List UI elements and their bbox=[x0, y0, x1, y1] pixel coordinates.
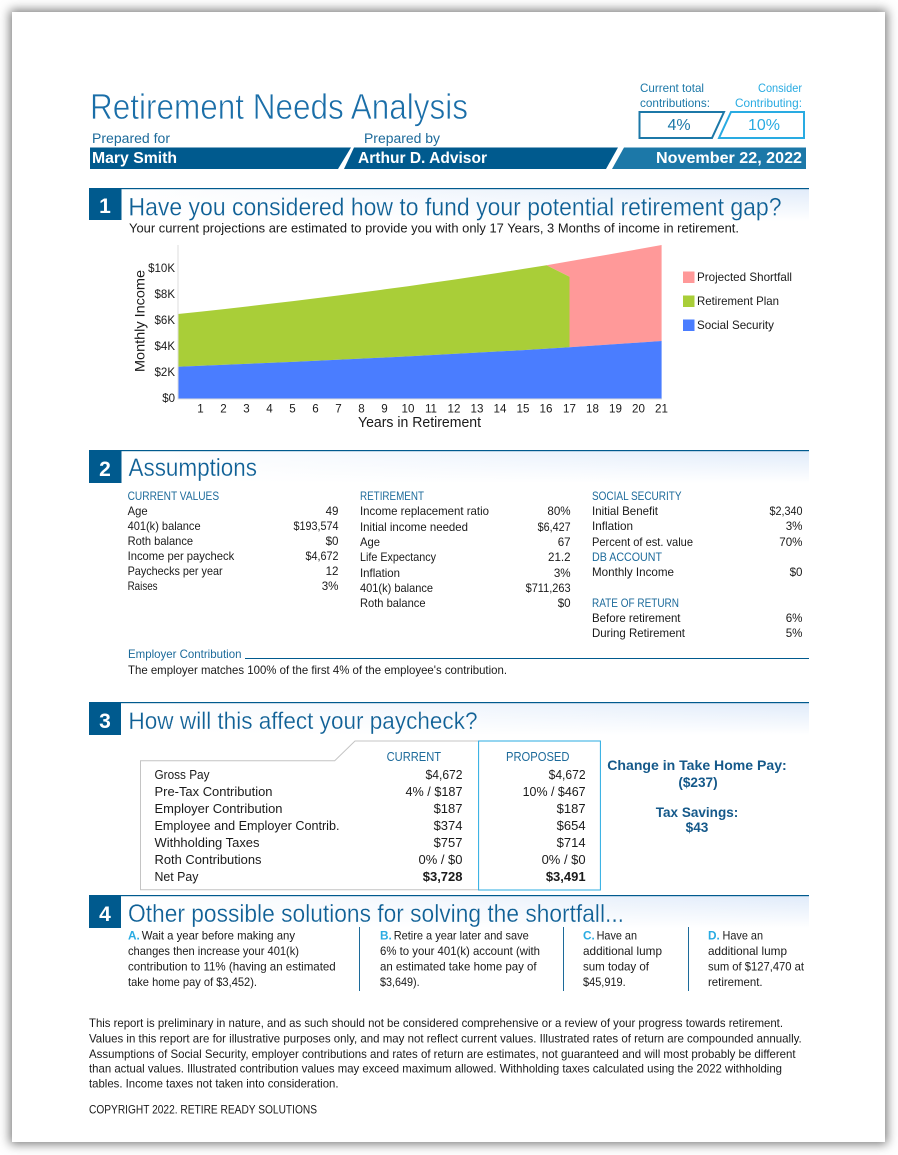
section 1 heading: Have you considered how to fund your potential retirement gap? bbox=[128, 194, 782, 222]
column headers: CURRENT bbox=[387, 749, 441, 764]
solution B: 6% to your 401(k) account (with bbox=[380, 944, 540, 958]
take home pay summary: Change in Take Home Pay: bbox=[607, 758, 787, 773]
name bar: advisor: Arthur D. Advisor bbox=[358, 150, 487, 167]
assumptions: current values: Age bbox=[128, 505, 148, 518]
table rows: $757 bbox=[434, 835, 462, 850]
table rows: $3,728 bbox=[423, 869, 462, 884]
assumptions: retirement: Inflation bbox=[360, 567, 400, 580]
consider contributing: Consider bbox=[758, 82, 802, 95]
take home pay summary bbox=[607, 758, 787, 835]
table rows: $654 bbox=[557, 818, 586, 833]
y axis labels: $2K bbox=[155, 367, 175, 379]
table rows: $374 bbox=[434, 818, 462, 833]
x axis labels bbox=[197, 402, 668, 416]
assumptions: social security, DB account and rate of return: SOCIAL SECURITY bbox=[592, 490, 682, 503]
name bar: client bbox=[90, 148, 351, 169]
section 4 heading: Other possible solutions for solving the shortfall... bbox=[128, 900, 624, 928]
assumptions: retirement: Income replacement ratio bbox=[360, 505, 489, 518]
assumptions: retirement: Initial income needed bbox=[360, 521, 468, 534]
y axis labels: $8K bbox=[155, 289, 175, 301]
assumptions: retirement: $711,263 bbox=[526, 582, 571, 595]
social security area bbox=[178, 341, 662, 398]
solution D: additional lump bbox=[708, 944, 787, 958]
x axis labels: 6 bbox=[312, 402, 319, 416]
section 1 intro text: Your current projections are estimated to provide you with only 17 Years, 3 Months of income in retirement. bbox=[129, 220, 739, 236]
assumptions: current values: 49 bbox=[326, 505, 338, 518]
solution B: an estimated take home pay of bbox=[380, 960, 537, 974]
assumptions: retirement: 80% bbox=[547, 505, 571, 518]
assumptions: retirement: $0 bbox=[558, 597, 571, 610]
assumptions: retirement: 67 bbox=[558, 536, 571, 549]
solution D: sum of $127,470 at bbox=[708, 960, 805, 974]
y axis labels: $10K bbox=[148, 263, 175, 275]
disclaimer: This report is preliminary in nature, and as such should not be considered comprehensive or a review of your progress towards retirement. bbox=[89, 1017, 783, 1030]
x axis labels: 15 bbox=[517, 402, 529, 416]
table rows: $187 bbox=[434, 801, 462, 816]
table rows: 0% / $0 bbox=[542, 852, 586, 867]
x axis labels: 17 bbox=[563, 402, 576, 416]
x axis labels: 14 bbox=[494, 402, 507, 416]
current contributions: Current total bbox=[640, 82, 704, 95]
x axis labels: 19 bbox=[609, 402, 622, 416]
table rows: Employer Contribution bbox=[154, 801, 282, 816]
x axis labels: 7 bbox=[335, 402, 342, 416]
assumptions: current values: $0 bbox=[326, 535, 338, 548]
assumptions: social security, DB account and rate of return bbox=[592, 490, 802, 640]
solution B bbox=[359, 927, 540, 991]
assumptions: current values: CURRENT VALUES bbox=[128, 490, 219, 503]
employer contribution bbox=[128, 648, 809, 677]
paycheck table bbox=[140, 741, 600, 890]
assumptions: retirement: $6,427 bbox=[538, 521, 571, 534]
table rows: $4,672 bbox=[549, 767, 586, 782]
x axis title: Years in Retirement bbox=[358, 415, 481, 431]
solution C: C. bbox=[583, 928, 595, 942]
projected shortfall area bbox=[546, 245, 662, 347]
assumptions: social security, DB account and rate of return: 5% bbox=[786, 627, 802, 640]
consider contributing: Contributing: bbox=[735, 97, 802, 110]
assumptions: social security, DB account and rate of return: DB ACCOUNT bbox=[592, 551, 662, 564]
table rows: Roth Contributions bbox=[154, 852, 262, 867]
column headers: PROPOSED bbox=[506, 749, 570, 764]
disclaimer bbox=[89, 1017, 802, 1090]
date bar bbox=[612, 148, 806, 169]
table rows: $187 bbox=[557, 801, 586, 816]
assumptions: social security, DB account and rate of return: Monthly Income bbox=[592, 566, 674, 579]
assumptions: current values: Paychecks per year bbox=[128, 565, 223, 578]
section 2 heading: Assumptions bbox=[128, 454, 257, 482]
x axis labels: 8 bbox=[358, 402, 365, 416]
x axis labels: 20 bbox=[632, 402, 645, 416]
table outline bbox=[140, 741, 479, 890]
solution D: Have an bbox=[722, 928, 763, 942]
legend: Retirement Plan bbox=[697, 295, 779, 308]
table rows: $714 bbox=[557, 835, 586, 850]
column headers bbox=[387, 749, 570, 764]
consider contributing bbox=[719, 82, 804, 138]
solution D: retirement. bbox=[708, 975, 763, 989]
table rows: Gross Pay bbox=[154, 767, 210, 782]
x axis labels: 2 bbox=[220, 402, 227, 416]
solution B: Retire a year later and save bbox=[394, 928, 529, 942]
legend bbox=[683, 271, 792, 332]
legend: Social Security bbox=[697, 319, 774, 332]
prepared by label: Prepared by bbox=[364, 131, 440, 146]
section 3 heading: 3 bbox=[99, 710, 111, 733]
solution A: A. bbox=[128, 928, 140, 942]
current contributions: contributions: bbox=[640, 97, 710, 110]
disclaimer: tables. Income taxes not taken into consideration. bbox=[89, 1078, 338, 1090]
assumptions: social security, DB account and rate of return: Before retirement bbox=[592, 612, 681, 625]
table rows: $4,672 bbox=[426, 767, 462, 782]
x axis labels: 3 bbox=[243, 402, 250, 416]
employer contribution: The employer matches 100% of the first 4% of the employee's contribution. bbox=[128, 664, 507, 677]
solution A: Wait a year before making any bbox=[142, 928, 295, 942]
solution B: $3,649). bbox=[380, 975, 420, 989]
y axis title: Monthly Income bbox=[132, 270, 148, 372]
assumptions: retirement: Age bbox=[360, 536, 380, 549]
section 4 heading: 4 bbox=[99, 903, 111, 926]
assumptions: current values: $4,672 bbox=[306, 550, 338, 563]
assumptions: current values bbox=[128, 490, 339, 593]
table rows: 4% / $187 bbox=[406, 784, 462, 799]
x axis labels: 10 bbox=[402, 402, 414, 416]
table rows: $3,491 bbox=[546, 869, 586, 884]
y axis labels bbox=[148, 263, 175, 405]
section 2 heading bbox=[89, 450, 809, 483]
solution C: $45,919. bbox=[583, 975, 626, 989]
assumptions: retirement: 3% bbox=[554, 567, 571, 580]
name bar: client: Mary Smith bbox=[92, 150, 177, 167]
x axis labels: 16 bbox=[540, 402, 552, 416]
assumptions: current values: 3% bbox=[322, 580, 338, 593]
x axis labels: 5 bbox=[289, 402, 296, 416]
assumptions: social security, DB account and rate of return: Initial Benefit bbox=[592, 505, 659, 518]
section 4 heading bbox=[89, 895, 809, 928]
legend: Projected Shortfall bbox=[697, 271, 792, 284]
assumptions: retirement: 21.2 bbox=[548, 551, 571, 564]
consider contributing: 10% bbox=[748, 117, 780, 134]
solution C: Have an bbox=[597, 928, 637, 942]
name bar: advisor bbox=[344, 148, 618, 169]
y axis labels: $6K bbox=[155, 315, 175, 327]
assumptions: social security, DB account and rate of return: $2,340 bbox=[770, 505, 802, 518]
current contributions bbox=[640, 82, 724, 138]
table rows bbox=[154, 767, 586, 884]
section 3 heading bbox=[89, 702, 809, 735]
disclaimer: than actual values. Illustrated contribution values may exceed maximum allowed. Withholding taxes calculated using the 2022 withholding bbox=[89, 1062, 782, 1076]
axes bbox=[178, 245, 662, 399]
assumptions: current values: $193,574 bbox=[294, 520, 339, 533]
area chart bbox=[132, 245, 792, 431]
assumptions: social security, DB account and rate of return: 3% bbox=[786, 520, 802, 533]
y axis labels: $0 bbox=[162, 393, 175, 405]
solution B: B. bbox=[380, 928, 392, 942]
section 3 heading: How will this affect your paycheck? bbox=[128, 708, 478, 735]
assumptions: retirement: Roth balance bbox=[360, 597, 426, 610]
proposed column highlight bbox=[479, 741, 600, 890]
assumptions: current values: 401(k) balance bbox=[128, 520, 201, 533]
section 1 heading: 1 bbox=[99, 195, 111, 218]
table rows: Net Pay bbox=[154, 869, 199, 884]
assumptions: current values: Raises bbox=[128, 580, 158, 593]
assumptions: social security, DB account and rate of return: 70% bbox=[779, 536, 802, 549]
assumptions: social security, DB account and rate of return: $0 bbox=[790, 566, 802, 579]
solution D bbox=[688, 927, 805, 991]
solution A: take home pay of $3,452). bbox=[128, 975, 257, 989]
x axis labels: 11 bbox=[425, 402, 437, 416]
solution C: additional lump bbox=[583, 944, 662, 958]
disclaimer: Values in this report are for illustrative purposes only, and may not reflect current values. Illustrated rates of return are compounded annually. bbox=[89, 1032, 802, 1046]
assumptions: social security, DB account and rate of return: RATE OF RETURN bbox=[592, 597, 679, 610]
table rows: 0% / $0 bbox=[418, 852, 462, 867]
assumptions: retirement: RETIREMENT bbox=[360, 490, 424, 503]
date bar: November 22, 2022 bbox=[656, 150, 802, 167]
solution A: contribution to 11% (having an estimated bbox=[128, 960, 336, 974]
solution C: sum today of bbox=[583, 960, 650, 974]
header bbox=[90, 82, 806, 169]
assumptions: social security, DB account and rate of return: Inflation bbox=[592, 520, 633, 533]
solution D: D. bbox=[708, 928, 720, 942]
disclaimer: Assumptions of Social Security, employer contributions and rates of return are estimates, not guaranteed and will most probably be different bbox=[89, 1048, 796, 1061]
assumptions: retirement: Life Expectancy bbox=[360, 551, 436, 564]
solution C bbox=[563, 927, 662, 991]
x axis labels: 12 bbox=[448, 402, 460, 416]
x axis labels: 18 bbox=[586, 402, 599, 416]
assumptions: current values: Income per paycheck bbox=[128, 550, 234, 563]
assumptions: current values: Roth balance bbox=[128, 535, 193, 548]
assumptions: social security, DB account and rate of return: During Retirement bbox=[592, 627, 686, 640]
table rows: Withholding Taxes bbox=[154, 835, 260, 850]
solution A: changes then increase your 401(k) bbox=[128, 944, 299, 958]
table rows: Employee and Employer Contrib. bbox=[154, 818, 340, 833]
table rows: Pre-Tax Contribution bbox=[154, 784, 272, 799]
assumptions: retirement: 401(k) balance bbox=[360, 582, 433, 595]
x axis labels: 1 bbox=[197, 402, 204, 416]
solution A bbox=[128, 928, 336, 989]
take home pay summary: ($237) bbox=[678, 775, 718, 790]
x axis labels: 21 bbox=[655, 402, 668, 416]
take home pay summary: $43 bbox=[686, 820, 709, 835]
current contributions: 4% bbox=[667, 117, 691, 134]
y axis labels: $4K bbox=[155, 341, 175, 353]
x axis labels: 9 bbox=[381, 402, 388, 416]
x axis labels: 4 bbox=[266, 402, 273, 416]
title: Retirement Needs Analysis bbox=[90, 86, 468, 127]
employer contribution: Employer Contribution bbox=[128, 648, 242, 661]
assumptions: social security, DB account and rate of return: 6% bbox=[786, 612, 802, 625]
retirement plan area bbox=[178, 265, 570, 367]
prepared for label: Prepared for bbox=[92, 131, 171, 146]
x axis labels: 13 bbox=[471, 402, 483, 416]
assumptions: social security, DB account and rate of return: Percent of est. value bbox=[592, 536, 693, 549]
copyright: COPYRIGHT 2022. RETIRE READY SOLUTIONS bbox=[89, 1104, 317, 1116]
table rows: 10% / $467 bbox=[523, 784, 586, 799]
assumptions: retirement bbox=[360, 490, 571, 610]
take home pay summary: Tax Savings: bbox=[656, 805, 738, 820]
assumptions: current values: 12 bbox=[326, 565, 338, 578]
section 2 heading: 2 bbox=[99, 458, 111, 481]
